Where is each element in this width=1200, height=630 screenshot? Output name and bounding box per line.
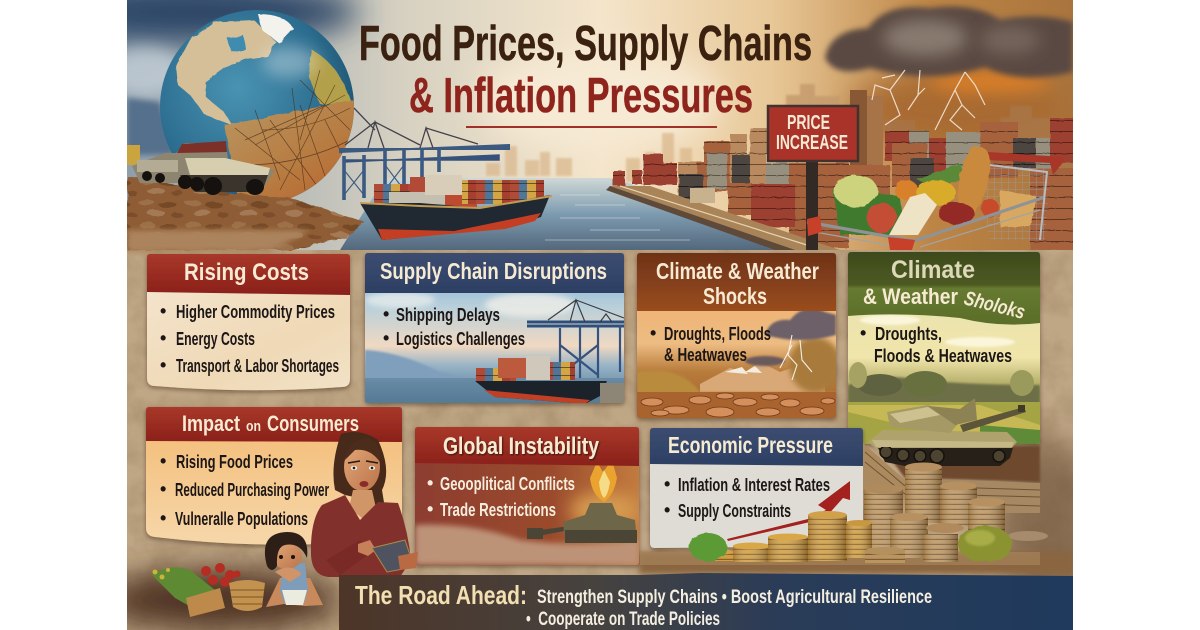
bullet list: rising costs: • [160,355,166,375]
bullet list: economic pressure: • [664,500,670,520]
background city and stacked containers [613,84,1073,250]
panel: rising costs [147,254,350,390]
bullet list: impact on consumers [160,451,329,529]
wooden platform [640,443,1040,565]
rear stacks [864,462,1005,549]
bullet list: rising costs: Energy Costs [176,329,255,349]
lightning [872,70,985,130]
front stacks [715,511,1048,563]
container ship [360,175,552,240]
heading: climate and weather sholoks [864,260,1024,318]
produce and baskets [152,563,265,617]
bullet list: economic pressure: Inflation & Interest Rates [678,475,830,495]
bullet list: rising costs [160,301,339,376]
heading: climate and weather shocks [656,262,819,304]
quay with railing [606,186,840,250]
woman figure [311,432,418,577]
title: & Inflation Pressures [409,69,753,123]
coin stacks [715,462,1048,563]
water [340,178,800,250]
bullet list: impact on consumers: Vulneralle Populations [175,509,308,529]
heading: climate and weather shocks: Climate & Weather [656,258,819,284]
bullet list: global instability: Geooplitical Conflicts [440,474,575,494]
storm cloud [825,6,1073,77]
title [359,17,812,128]
bullet list: climate sholoks [860,326,1012,362]
bullet list: supply chain [383,304,525,349]
bullet list: climate shocks: & Heatwaves [664,345,747,365]
heading: climate and weather shocks: Shocks [703,283,767,309]
bullet list: global instability [428,476,574,516]
rubble ground [127,176,365,252]
bullet list: global instability: Trade Restrictions [440,500,556,520]
bullet list: impact on consumers: • [160,451,166,471]
bullet list: rising costs: • [160,328,166,348]
shopping cart with groceries [807,147,1065,250]
heading: impact on consumers: Consumers [267,411,359,436]
heading: impact on consumers [183,416,358,436]
military convoy vehicle [127,141,275,195]
bullet list: supply chain: • [383,328,389,348]
right stacks rear [885,131,909,161]
bullet list: climate shocks: Droughts, Floods [664,324,771,344]
distant skyline [486,133,692,182]
bullet list: supply chain: Shipping Delays [396,305,500,325]
arrow: rising price [727,481,850,541]
heading: climate and weather sholoks: Climate [891,256,975,284]
bullet list: economic pressure: • [664,474,670,494]
bullet list: supply chain: • [383,304,389,324]
top scene: sky [40,0,1073,250]
panel: global instability [415,427,640,565]
heading: economic pressure: Economic Pressure [668,432,833,458]
bullet list: impact on consumers: Rising Food Prices [176,452,293,472]
panel: climate and weather sholoks [848,252,1040,444]
price increase sign: INCREASE [776,132,848,154]
panel: economic pressure [650,428,863,548]
bullet list: impact on consumers: • [160,508,166,528]
recommendation line two: • Cooperate on Trade Policies [526,609,720,630]
recommendation line one: Strengthen Supply Chains • Boost Agricultural Resilience [537,587,932,608]
bullet list: climate sholoks: • [860,323,866,343]
icon: tank [868,398,1026,466]
icon: green bushes [689,526,1012,562]
bullet list: impact on consumers: • [160,479,166,499]
panel: impact on consumers [146,407,402,545]
bullet list: climate shocks: • [650,323,656,343]
child figure [265,532,323,607]
heading: supply chain disruptions: Supply Chain Disruptions [380,258,607,284]
bullet list: global instability: • [427,473,433,493]
heading: climate and weather sholoks: & Weather [863,284,958,309]
bullet list: climate sholoks: Droughts, [875,324,942,344]
bullet list: supply chain: Logistics Challenges [396,329,525,349]
bullet list: rising costs: Higher Commodity Prices [176,302,335,322]
port cranes [340,108,509,205]
heading: impact on consumers: on [246,418,261,435]
price increase sign: PRICE [787,112,830,134]
icon: globe [160,10,360,210]
bullet list: climate shocks [650,326,770,361]
middle stacks [632,170,642,184]
bullet list: rising costs: Transport & Labor Shortages [176,356,339,376]
heading: the road ahead: The Road Ahead: [355,580,527,610]
bullet list: climate sholoks: Floods & Heatwaves [874,346,1012,366]
title: Food Prices, Supply Chains [359,17,812,71]
panel: supply chain disruptions [365,253,624,404]
bullet list: economic pressure: Supply Constraints [678,501,791,521]
bullet list: impact on consumers: Reduced Purchasing Power [175,480,329,500]
bullet list: global instability: • [427,499,433,519]
panel: climate and weather shocks [637,253,841,418]
bullet list: economic pressure [664,474,830,521]
heading: global instability: Global Instability [443,433,600,460]
heading: rising costs: Rising Costs [184,259,309,286]
price increase sign [768,106,858,250]
heading: impact on consumers: Impact [182,411,241,436]
bullet list: rising costs: • [160,301,166,321]
heading: climate and weather sholoks: Sholoks [962,288,1027,324]
canvas background [127,0,1073,630]
panel: the road ahead [339,573,1073,630]
